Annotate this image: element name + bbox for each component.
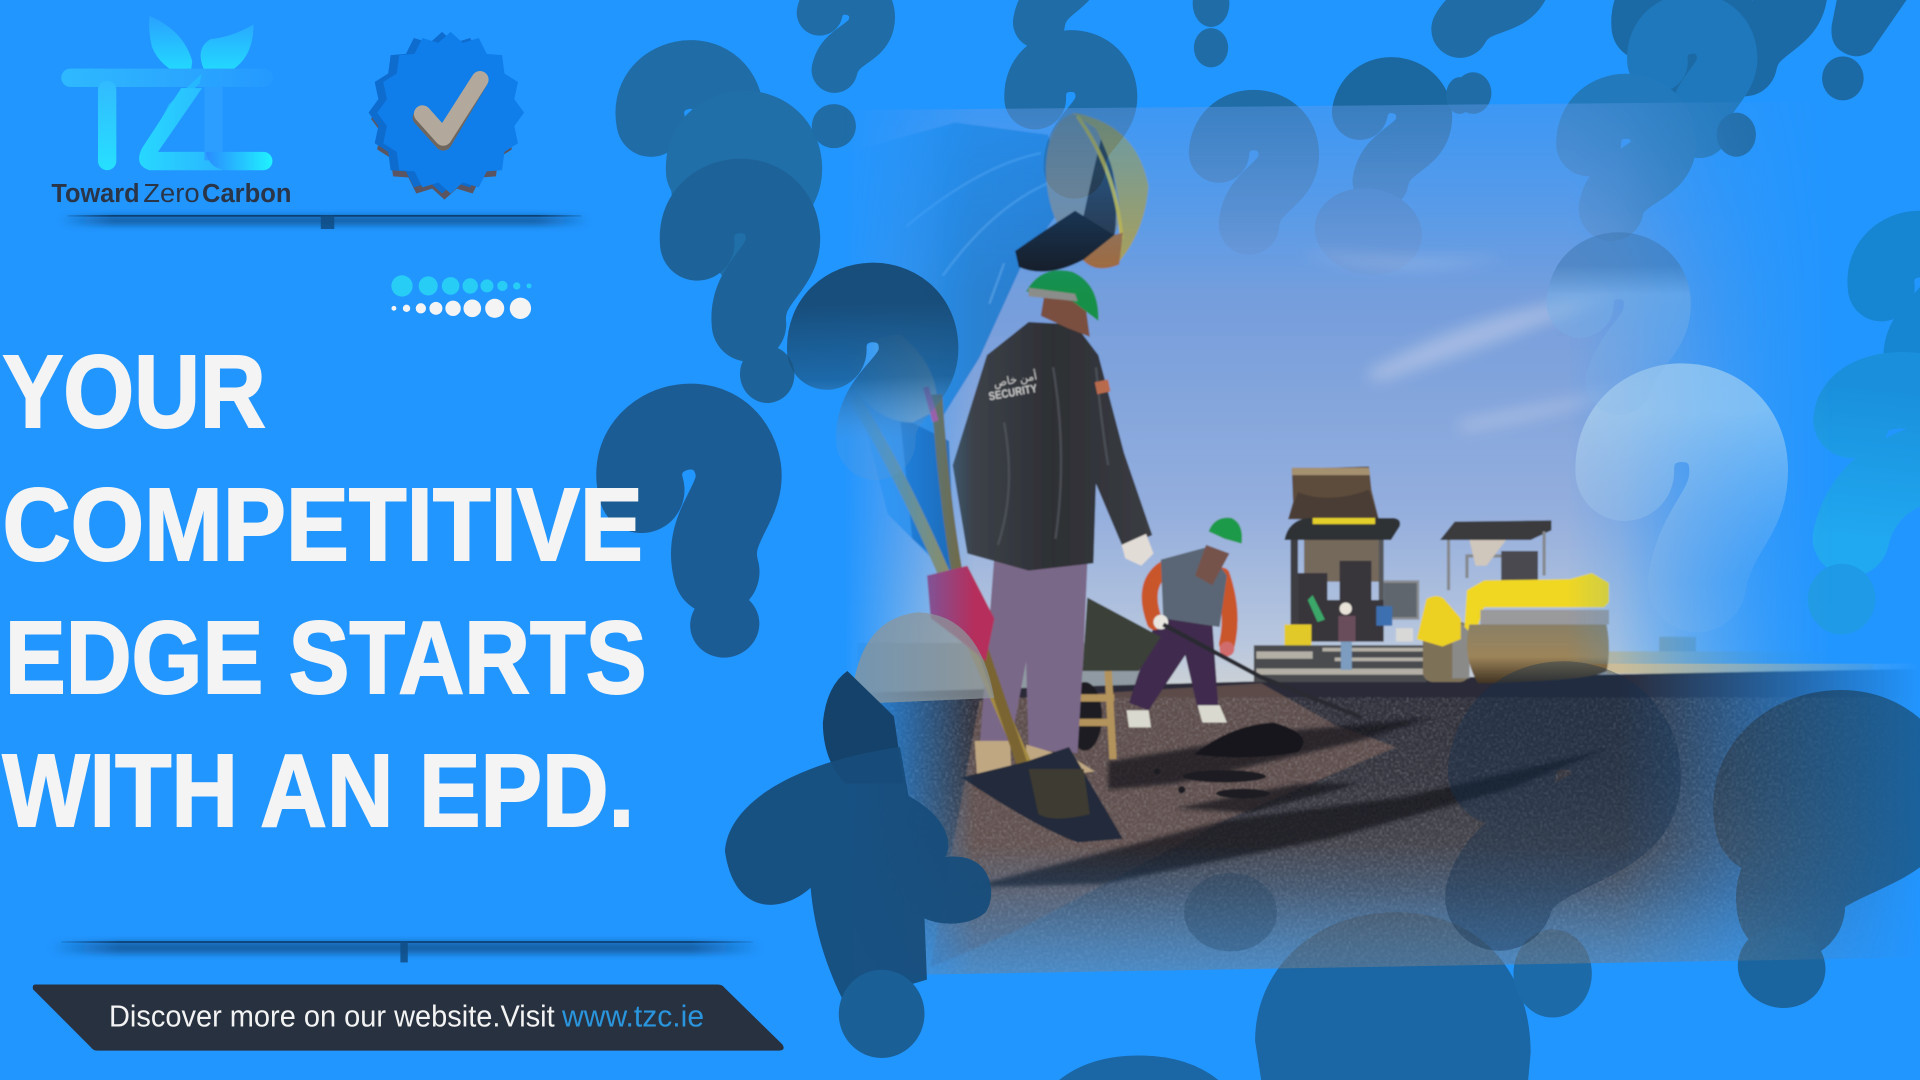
gloves	[1153, 615, 1234, 656]
badge bottom edge	[371, 38, 518, 200]
logo: Toward Zero Carbon	[51, 16, 291, 208]
question mark: big bottom right	[1756, 732, 1920, 907]
small cabin on horizon	[1659, 637, 1696, 651]
gravel pile	[1194, 722, 1303, 757]
logo leaves	[149, 16, 253, 80]
exclamation mark: top	[1193, 0, 1229, 67]
logo wordmark: Zero	[143, 178, 200, 208]
question mark: top right mid	[1641, 0, 1730, 104]
shovel blade	[961, 747, 1123, 842]
question mark: top stem	[809, 0, 877, 75]
question mark: right of photo top	[1589, 106, 1664, 209]
wheelbarrow wooden frame	[1051, 671, 1114, 759]
call to action banner	[33, 984, 784, 1051]
tan embankment	[1607, 651, 1873, 673]
question mark: large beside heading	[628, 415, 788, 668]
question mark: upper-left mid	[699, 124, 792, 255]
horizon dome on left	[851, 612, 994, 704]
check mark	[422, 80, 480, 137]
green helmet	[1026, 270, 1098, 321]
logo letter Z	[139, 73, 223, 170]
green helmet	[1209, 518, 1242, 544]
light question mark: sky upper right	[1580, 266, 1657, 381]
foreground worker body	[845, 108, 1149, 842]
boots	[1127, 705, 1227, 727]
question mark: big bottom left head and stem	[725, 747, 991, 1004]
hanging towel	[1469, 540, 1506, 566]
dot of top right question mark	[1717, 113, 1756, 157]
paver cabin back wall	[1304, 540, 1380, 582]
face mask	[1195, 545, 1229, 585]
question mark: bottom dome	[1059, 1056, 1218, 1080]
rake handle	[1163, 624, 1362, 718]
shovel handle right	[937, 394, 1022, 765]
logo wordmark: Carbon	[202, 178, 291, 208]
scattered gravel	[1154, 768, 1270, 798]
photo: road workers and paving machines	[845, 100, 1920, 980]
dark lobe under horizon dome	[823, 671, 904, 784]
divider: top	[59, 215, 590, 229]
white dot row	[391, 298, 531, 319]
unpaved brown road section	[931, 683, 1396, 967]
green object	[1308, 595, 1325, 622]
heading: EDGE STARTS	[5, 600, 647, 715]
roller drum	[1467, 624, 1609, 683]
face and scarf	[1041, 294, 1090, 337]
blue shirt	[845, 122, 1065, 576]
worker in green helmet	[1127, 518, 1362, 727]
question mark: top centre front	[1033, 59, 1110, 170]
wheelbarrow	[1051, 598, 1161, 759]
logo wordmark: Toward	[51, 178, 140, 208]
question mark: upper-left far	[643, 67, 745, 200]
boots	[975, 741, 1095, 779]
question mark: top stem pair	[1431, 0, 1536, 45]
icon: verified check badge	[369, 32, 524, 200]
question mark: top right front	[1654, 20, 1734, 131]
security text on jacket: SECURITY	[988, 382, 1038, 403]
light question mark: sky right	[1623, 411, 1743, 585]
banner text: Discover more on our website.Visit	[109, 1000, 555, 1034]
roller frame bar	[1480, 610, 1609, 624]
worker in security jacket	[953, 270, 1153, 779]
yellow hard hat shell	[1071, 113, 1149, 264]
road surface	[845, 669, 1920, 980]
heading: YOUR	[2, 334, 266, 449]
shirt highlight folds	[906, 153, 1047, 304]
paver	[1254, 467, 1428, 682]
roller canopy	[1440, 520, 1551, 540]
pink glove	[927, 566, 994, 661]
check mark shadow	[421, 82, 479, 142]
question mark: behind top edge of photo	[1214, 118, 1291, 227]
question mark: upper-left front	[693, 192, 800, 409]
paver deck	[1254, 645, 1427, 682]
sky	[845, 100, 1920, 688]
question mark: right edge lower	[1804, 382, 1920, 646]
question mark: bottom centre head	[1255, 912, 1531, 1080]
paver cabin frame	[1291, 540, 1298, 626]
white panel	[1396, 628, 1413, 642]
dot pair under top stem	[1446, 72, 1491, 114]
dot of top stem question mark	[812, 104, 856, 148]
question mark: lower stem below photo	[1513, 929, 1592, 1018]
hair and neck	[1015, 211, 1114, 272]
worker in white hat on paver	[1338, 602, 1356, 670]
sleeve blue lower	[900, 416, 955, 576]
roller seat	[1501, 551, 1538, 583]
yellow side fender	[1417, 596, 1461, 647]
exclamation mark: top right	[1822, 0, 1907, 100]
worker shadows on road	[967, 718, 1607, 888]
yellow hard hat rim	[1078, 116, 1122, 239]
grey vest	[1161, 547, 1227, 627]
question mark: bottom left dot	[839, 970, 924, 1058]
trousers	[1129, 616, 1218, 710]
heading: WITH AN EPD.	[2, 733, 634, 848]
arabic text on jacket: أمن خاص	[992, 368, 1038, 390]
roller rear wheel	[1423, 622, 1469, 682]
logo letter T	[61, 69, 273, 170]
yellow roller chassis	[1464, 573, 1609, 637]
roller canopy posts	[1449, 531, 1544, 590]
brown hat underside	[1082, 233, 1123, 268]
question mark: top centre right	[1308, 76, 1447, 283]
logo letter L	[204, 87, 272, 170]
question mark: over foreground glove	[825, 301, 922, 442]
paver canopy	[1284, 518, 1400, 540]
yellow panel	[1284, 623, 1313, 646]
question mark: dark over road head	[1489, 709, 1633, 909]
distant ground	[857, 643, 1139, 694]
shovel handle left	[853, 398, 1026, 765]
badge side edge	[369, 32, 516, 193]
flag patch	[1095, 379, 1111, 394]
badge face	[377, 32, 524, 193]
dot of bottom right question mark	[1729, 917, 1835, 1018]
pink strap	[926, 387, 936, 421]
hard hat liner	[1037, 108, 1130, 259]
dark dot on road	[1184, 873, 1277, 951]
heading	[2, 334, 647, 848]
jacket creases	[998, 367, 1108, 545]
cyan dot row	[391, 275, 531, 297]
question marks over the photo	[725, 266, 1743, 1058]
wheelbarrow tray	[1082, 598, 1161, 671]
wheelbarrow wheel	[1068, 682, 1102, 751]
question mark: top centre back	[1009, 0, 1081, 27]
logo wordmark	[51, 178, 291, 208]
paver side rails	[1384, 582, 1418, 618]
road grain	[890, 697, 1843, 974]
white glove	[1122, 534, 1153, 566]
decorative dot pattern	[391, 275, 531, 319]
hard hat dark interior	[1078, 135, 1116, 245]
heading: COMPETITIVE	[2, 467, 643, 582]
banner link: www.tzc.ie	[561, 1000, 704, 1034]
paver seats and machinery	[1298, 561, 1384, 642]
jacket	[953, 322, 1152, 571]
question mark: top right back	[1708, 0, 1801, 70]
dump truck bed	[1288, 467, 1379, 519]
road roller	[1417, 520, 1609, 683]
clouds	[1328, 252, 1592, 433]
orange sleeves	[1150, 569, 1230, 644]
question mark: right edge upper	[1876, 239, 1920, 359]
blue drum	[1376, 606, 1392, 626]
question marks behind the photo	[628, 0, 1920, 1080]
grey glove	[847, 334, 937, 422]
trousers	[980, 557, 1087, 753]
banner shape	[33, 984, 784, 1051]
divider: bottom	[49, 941, 762, 962]
